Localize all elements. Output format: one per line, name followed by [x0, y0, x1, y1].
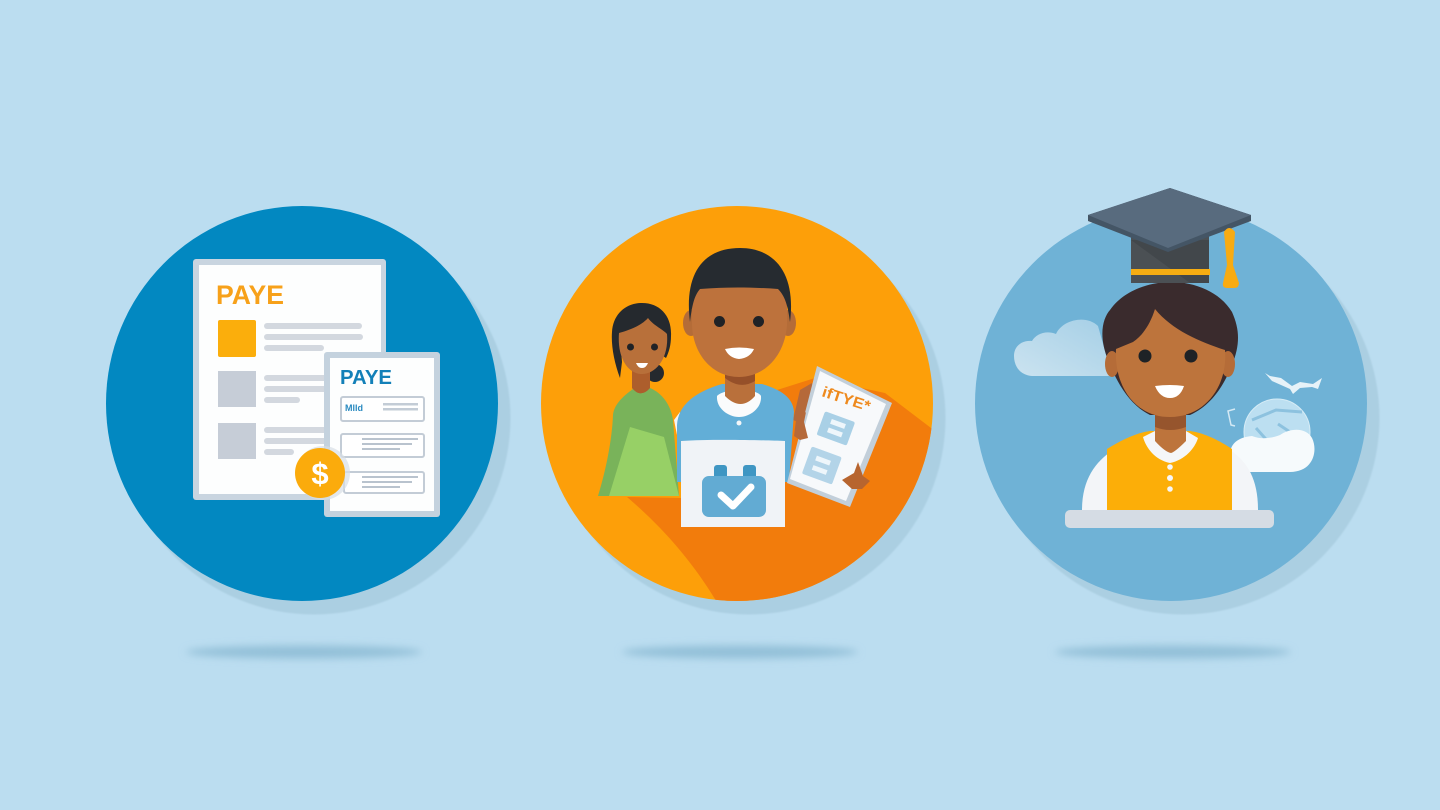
cap board — [1088, 188, 1251, 252]
adult sweater — [677, 384, 794, 482]
child dress front — [609, 427, 679, 496]
ground shadow: family — [622, 646, 858, 658]
graduate shirt — [1082, 450, 1258, 510]
adult ears — [683, 310, 699, 336]
graduate eyes — [1138, 350, 1152, 362]
form field: first: Mlld — [345, 403, 363, 413]
child dress — [598, 388, 679, 496]
figure: child — [598, 303, 679, 496]
cap tassel — [1223, 228, 1239, 288]
circle: graduate background — [975, 206, 1367, 601]
adult neck — [725, 370, 755, 404]
adult face — [692, 282, 787, 377]
icon: right cloud and globe — [1228, 373, 1322, 472]
icon: dollar coin: $ — [311, 456, 329, 491]
child hair bun — [646, 364, 664, 382]
adult hair — [689, 248, 791, 322]
icon: dollar coin — [295, 446, 350, 500]
form field: second — [341, 434, 424, 457]
panel: PAYE documents — [106, 206, 510, 658]
circle: documents background — [106, 206, 498, 601]
adult collar — [717, 390, 761, 417]
panel: graduate — [975, 188, 1380, 658]
graduate collar — [1143, 431, 1198, 463]
graduate vest — [1107, 431, 1232, 510]
list row: orange — [218, 320, 363, 357]
ground shadow: documents — [186, 646, 422, 658]
circle shadow: documents — [118, 222, 510, 614]
long cast shadow — [627, 378, 960, 604]
leaflet block one — [817, 411, 855, 446]
heading: PAYE blue: PAYE — [340, 366, 392, 389]
child smile — [636, 363, 648, 368]
form field: first — [341, 397, 424, 421]
held leaflet — [787, 366, 892, 507]
figure: adult — [674, 248, 892, 527]
illustration scene — [106, 188, 1380, 662]
leaflet heading: ifTYE* — [820, 384, 873, 415]
graduate face — [1116, 309, 1225, 417]
icon: calendar check — [702, 465, 766, 517]
adult thumb — [794, 412, 808, 440]
leaflet block two — [802, 446, 842, 485]
graduate buttons — [1167, 464, 1173, 470]
panel: parent and child — [541, 206, 960, 658]
circle shadow: family — [552, 222, 946, 614]
child hair back — [612, 303, 671, 378]
child eyes — [627, 344, 634, 350]
heading: PAYE orange: PAYE — [216, 280, 284, 310]
figure: graduate student — [1065, 282, 1274, 528]
calendar card — [681, 440, 785, 527]
graduate neck — [1155, 410, 1186, 453]
cap band — [1131, 236, 1209, 283]
icon: graduation cap — [1088, 188, 1251, 288]
adult eyes — [714, 316, 725, 327]
icon: desk bar — [1065, 510, 1274, 528]
list row: grey two — [218, 423, 334, 459]
child face — [619, 318, 667, 374]
form field: third — [344, 472, 424, 493]
list row: grey one — [218, 371, 334, 407]
graduate smile — [1155, 385, 1184, 398]
small document — [324, 352, 440, 517]
graduate ears — [1105, 351, 1119, 377]
circle shadow: graduate — [986, 222, 1380, 614]
adult smile — [725, 348, 754, 359]
adult forearm behind leaflet — [793, 383, 815, 425]
ground shadow: graduate — [1055, 646, 1291, 658]
large document — [193, 259, 386, 500]
adult lower hand — [842, 462, 870, 489]
child neck — [632, 368, 650, 394]
graduate hair — [1102, 282, 1238, 415]
child neck overlap — [632, 382, 650, 393]
icon: music note — [1228, 409, 1235, 426]
icon: left cloud — [1014, 320, 1112, 376]
adult sleeve edge — [674, 412, 680, 450]
circle: family background — [541, 206, 933, 601]
icon: small bird — [1265, 373, 1322, 394]
